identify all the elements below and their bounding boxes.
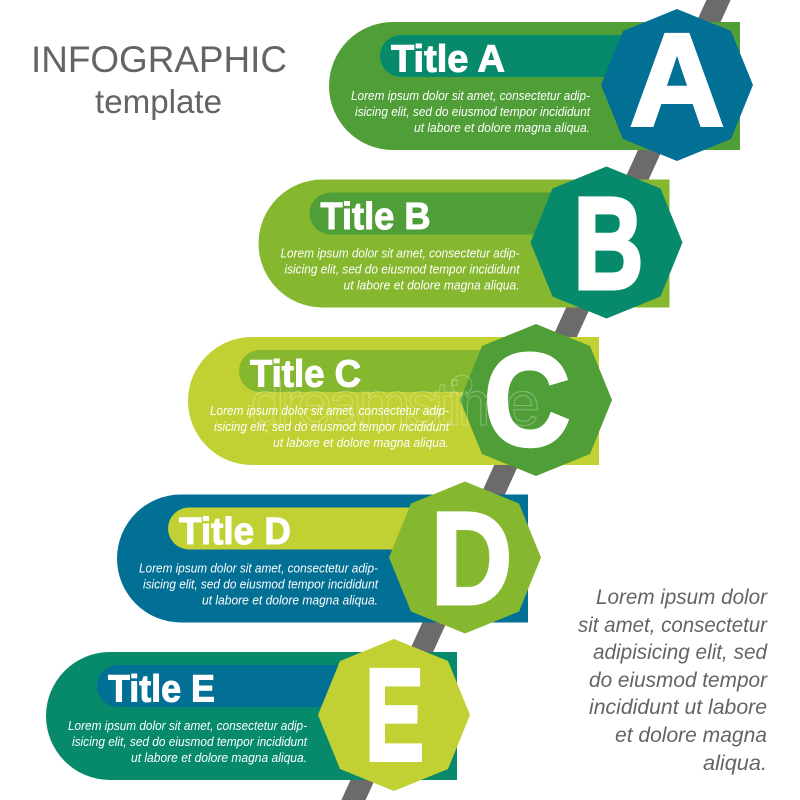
heading: infographic template: template <box>95 83 222 120</box>
title D: Title D <box>179 511 291 553</box>
body text D: isicing elit, sed do eiusmod tempor incididunt <box>143 576 379 592</box>
body text B: ut labore et dolore magna aliqua. <box>344 278 520 292</box>
body text C: ut labore et dolore magna aliqua. <box>273 435 449 450</box>
body text E: isicing elit, sed do eiusmod tempor incididunt <box>72 734 308 749</box>
title pill E <box>97 665 357 707</box>
panel: Title A <box>329 6 753 161</box>
title pill B <box>310 192 570 234</box>
body text B <box>280 246 521 292</box>
title B: Title B <box>320 196 430 238</box>
body text D: ut labore et dolore magna aliqua. <box>202 592 378 608</box>
title E: Title E <box>108 668 215 710</box>
title C: Title C <box>250 354 361 396</box>
octagon badge B <box>530 166 682 318</box>
side paragraph: sit amet, consectetur <box>578 614 768 637</box>
octagon badge A: A <box>630 6 724 153</box>
side paragraph: incididunt ut labore <box>589 696 767 719</box>
octagon badge E <box>318 639 470 791</box>
title pill A <box>380 35 640 77</box>
card A <box>329 22 740 150</box>
title A: Title A <box>391 38 505 80</box>
panel: Title D <box>117 482 541 634</box>
title pill C <box>239 350 499 392</box>
card C <box>188 337 599 465</box>
octagon badge D: D <box>431 484 512 632</box>
octagon badge A <box>601 6 753 161</box>
side paragraph: Lorem ipsum dolor <box>596 586 768 609</box>
card E <box>46 652 457 780</box>
panel: Title E <box>46 639 470 791</box>
body text B: Lorem ipsum dolor sit amet, consectetur adip- <box>280 246 520 260</box>
body text A: isicing elit, sed do eiusmod tempor incididunt <box>355 104 591 119</box>
body text A: Lorem ipsum dolor sit amet, consectetur adip- <box>351 88 591 103</box>
octagon badge C <box>460 324 612 476</box>
body text D: Lorem ipsum dolor sit amet, consectetur adip- <box>139 560 379 576</box>
side paragraph: do eiusmod tempor <box>589 669 768 692</box>
octagon badge E: E <box>365 641 424 788</box>
body text B: isicing elit, sed do eiusmod tempor incididunt <box>284 262 521 276</box>
title pill D <box>168 508 428 550</box>
body text C <box>210 403 450 450</box>
heading: infographic template: INFOGRAPHIC <box>31 39 287 80</box>
octagon badge C: C <box>484 326 570 473</box>
body text D <box>139 560 379 608</box>
diagonal connector line <box>348 0 724 800</box>
body text E <box>68 718 308 765</box>
body text C: isicing elit, sed do eiusmod tempor incididunt <box>214 419 450 434</box>
card B <box>258 180 670 308</box>
body text A <box>351 88 591 135</box>
side paragraph <box>578 586 768 775</box>
panel: Title C <box>188 324 612 476</box>
body text E: Lorem ipsum dolor sit amet, consectetur adip- <box>68 718 308 733</box>
watermark: dreamstime <box>250 370 540 439</box>
side paragraph: et dolore magna <box>615 724 767 747</box>
body text C: Lorem ipsum dolor sit amet, consectetur adip- <box>210 403 450 418</box>
body text A: ut labore et dolore magna aliqua. <box>414 120 590 135</box>
octagon badge B: B <box>574 170 644 316</box>
side paragraph: adipisicing elit, sed <box>593 641 768 664</box>
body text E: ut labore et dolore magna aliqua. <box>131 750 307 765</box>
heading: infographic template <box>31 39 287 120</box>
octagon badge D <box>389 482 541 634</box>
panel: Title B <box>258 166 682 318</box>
side paragraph: aliqua. <box>703 752 767 775</box>
card D <box>117 494 528 622</box>
